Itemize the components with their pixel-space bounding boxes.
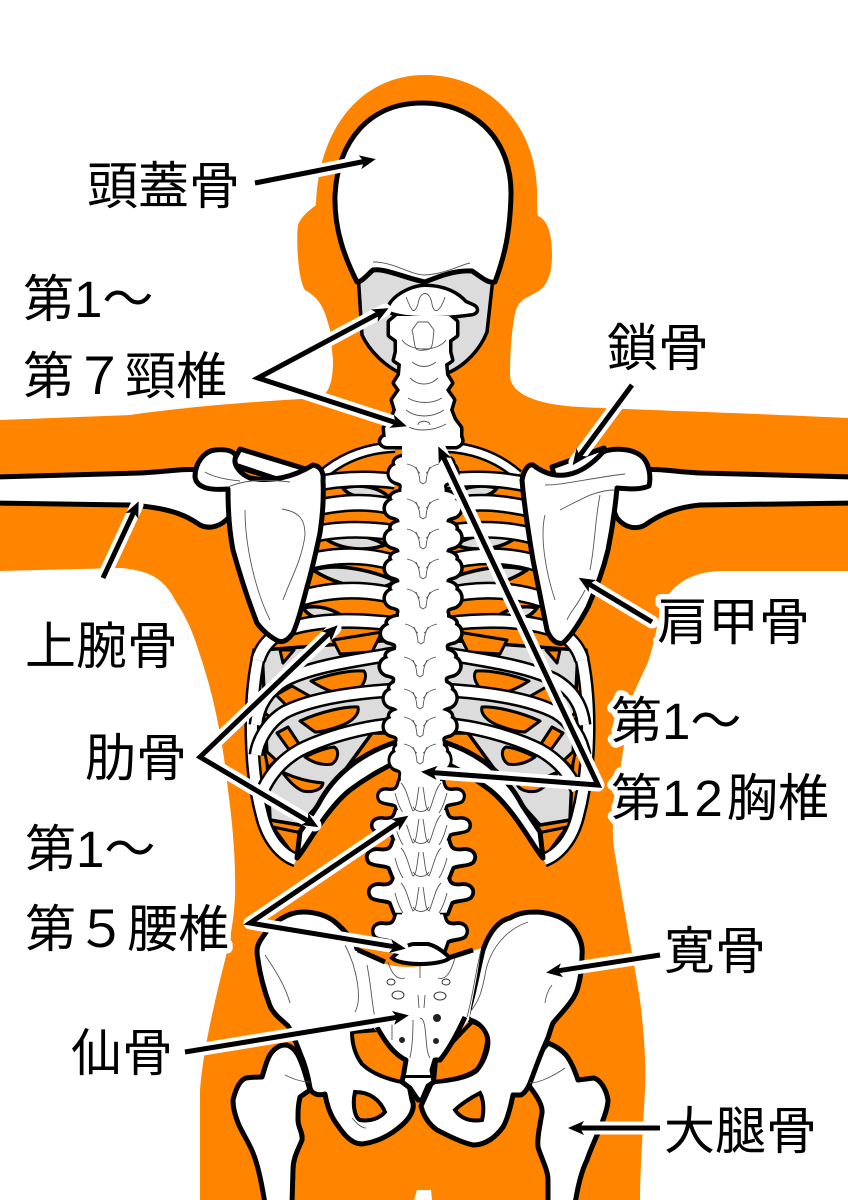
skull [335,103,511,282]
label: cervical vertebrae [23,271,227,405]
label: thoracic vertebrae [611,693,829,827]
label: clavicle: 鎖骨 [607,320,709,377]
label: lumbar vertebrae [25,821,229,958]
left femur [233,1045,310,1200]
arrow: hip bone [550,955,660,972]
rib cage left [252,447,398,860]
label: cervical vertebrae: 第1〜 [23,271,153,328]
left hip bone [257,912,413,1144]
right humerus [600,469,848,528]
arrow: ribs [200,628,335,825]
spine [369,287,476,964]
label: hip bone: 寛骨 [664,923,766,980]
label: femur: 大腿骨 [664,1103,817,1160]
label: cervical vertebrae: 第７頸椎 [23,348,227,405]
left scapula [195,450,323,642]
arrow: skull [255,160,372,183]
jaw shadow [358,268,493,372]
label: lumbar vertebrae: 第1〜 [25,821,155,878]
arrow: cervical vertebrae [258,310,403,425]
label: skull: 頭蓋骨 [87,158,240,215]
right hip bone [421,912,582,1145]
label: thoracic vertebrae: 第12胸椎 [611,770,829,827]
label: humerus: 上腕骨 [25,618,178,675]
label: sacrum: 仙骨 [71,1025,173,1082]
arrow: sacrum [185,1016,405,1052]
label: ribs: 肋骨 [85,730,187,787]
L5 base [392,944,450,964]
left humerus [0,469,240,527]
right scapula [522,449,650,643]
rib cage right [442,447,588,860]
vertebrae outlines [369,287,476,952]
label: scapula: 肩甲骨 [657,594,810,651]
arrow: femur [572,1122,660,1134]
bottom notch between legs [414,1190,432,1200]
right femur [525,1043,608,1200]
arrow: humerus [103,505,137,578]
right clavicle [552,448,612,482]
arrow: clavicle [575,385,632,462]
vertebrae detail [395,294,447,913]
arrow: lumbar vertebrae [250,818,405,948]
vertebrae fill [369,287,476,952]
arrow: thoracic vertebrae [425,450,598,785]
sacrum [354,948,481,1100]
label: lumbar vertebrae: 第５腰椎 [25,901,229,958]
left clavicle [232,449,322,492]
arrow: scapula [582,580,652,622]
label: thoracic vertebrae: 第1〜 [611,693,741,750]
